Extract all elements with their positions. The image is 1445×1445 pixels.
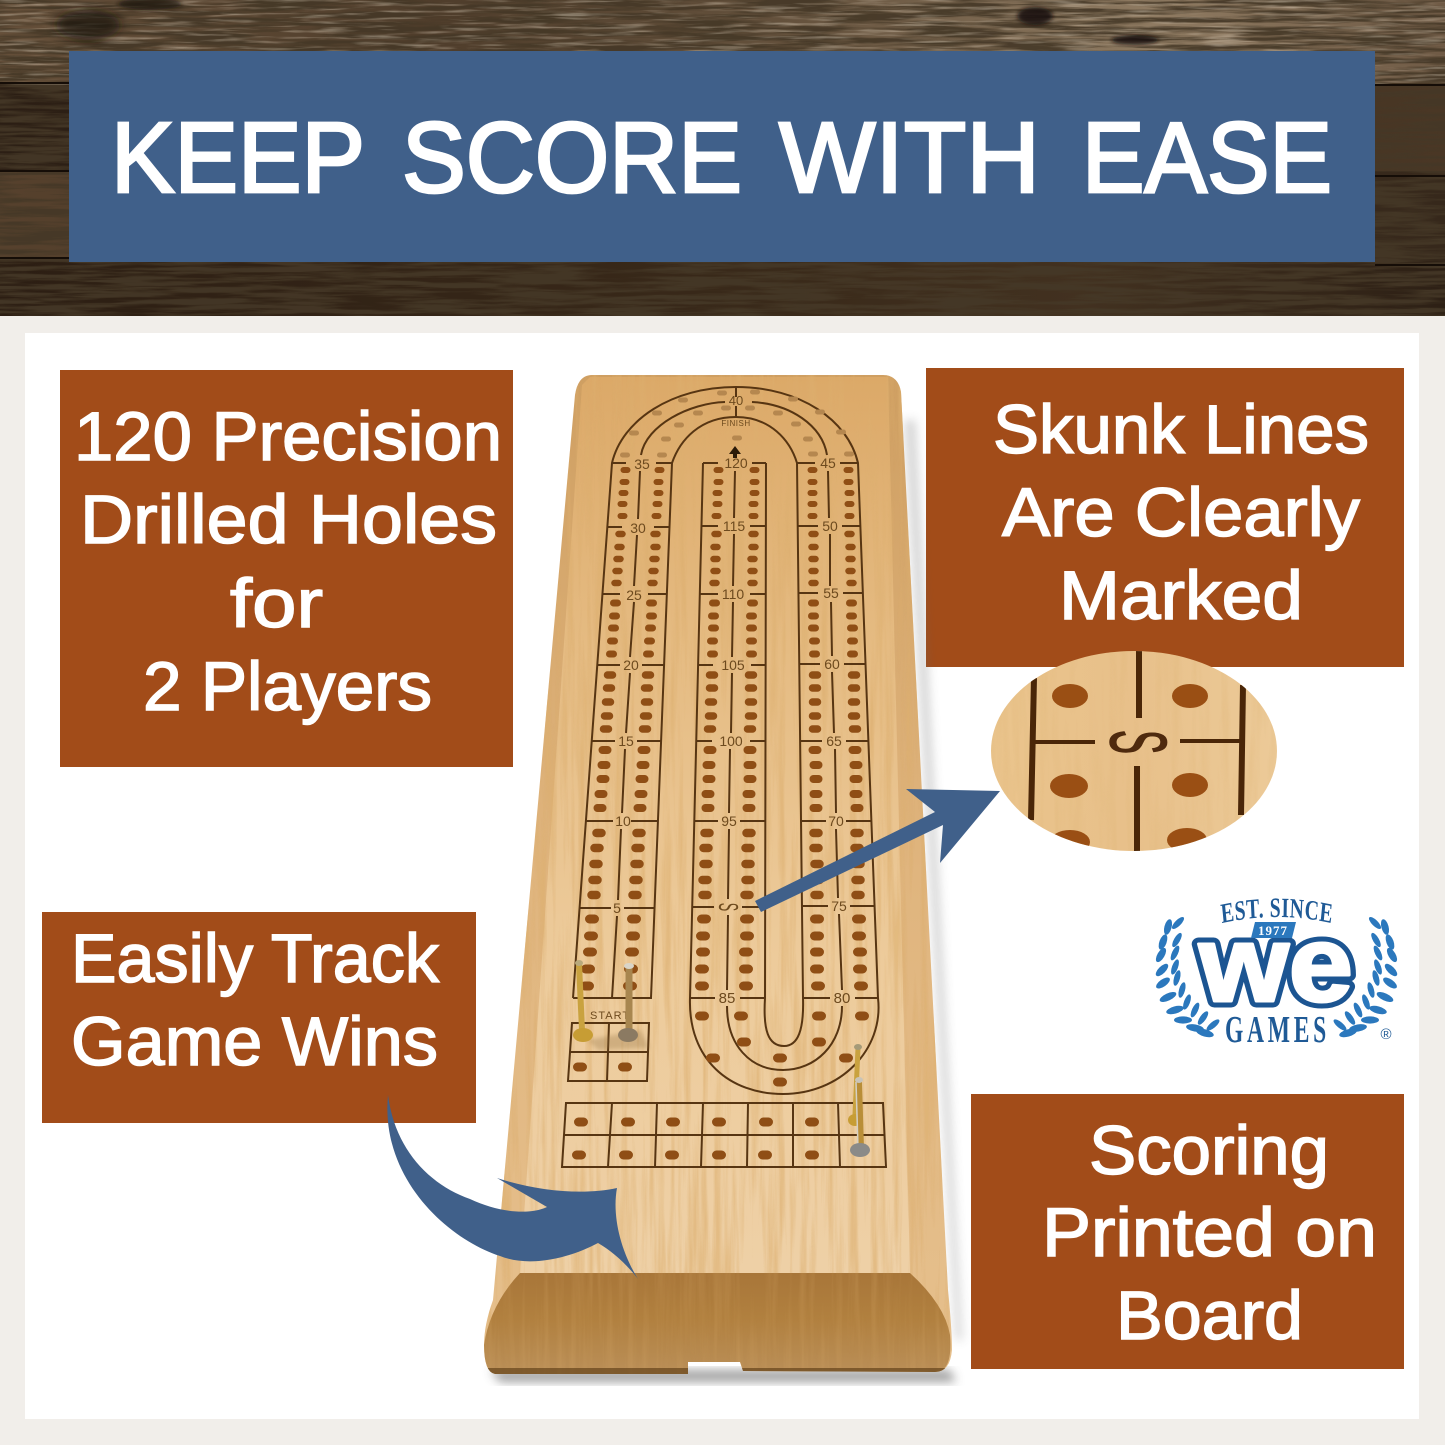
arrow: game wins pointer [387,1095,638,1279]
board numbers: 100 [719,733,743,749]
start box grid [568,1023,649,1081]
callout: track game wins: Easily Track [71,920,439,997]
board numbers: 15 [618,733,634,749]
board numbers: 105 [721,657,745,673]
board numbers: 55 [823,585,839,601]
logo games text: GAMES [1225,1008,1330,1050]
board numbers: 60 [824,656,840,672]
board numbers: 85 [719,990,735,1007]
board numbers: 45 [820,455,836,471]
header wood background [0,0,1445,316]
logo: WE Games [1156,898,1398,1050]
score grid [562,1103,886,1167]
board numbers: FINISH [721,419,751,428]
logo est since text: EST. SINCE [1220,898,1332,923]
logo 1977 banner: 1977 [1258,923,1288,938]
magnifier: skunk line close-up [985,645,1285,855]
board numbers: 110 [722,586,744,602]
logo laurel wreath left [1154,915,1221,1039]
logo 1977 banner [1251,922,1296,938]
callout: skunk lines [926,368,1404,667]
callout: 120 precision drilled holes: Drilled Holes [80,481,497,558]
board numbers: 115 [723,518,745,534]
title: KEEP [111,102,365,214]
callout: scoring printed on board: Scoring [1089,1112,1329,1189]
board numbers: 30 [630,520,646,536]
callout: 120 precision drilled holes [60,370,513,767]
arrow: skunk line pointer [755,789,1000,912]
board numbers: S [713,903,745,911]
title banner [69,51,1375,262]
board numbers: 5 [613,900,621,916]
title: SCORE [402,102,742,214]
cribbage board [480,370,962,1382]
board holes [576,392,864,1155]
logo we mark: we [1198,903,1353,1024]
board numbers: 20 [623,657,639,673]
board numbers: 50 [822,518,838,534]
callout: skunk lines: Skunk Lines [993,391,1369,468]
logo laurel wreath right [1332,915,1399,1039]
board track lines [573,387,879,1094]
board numbers: 35 [634,456,650,472]
callout: skunk lines: Marked [1059,557,1303,634]
board numbers [590,393,850,1022]
callout: 120 precision drilled holes: 2 Players [143,648,432,725]
title [111,102,1332,214]
title: WITH [779,102,1040,214]
board numbers: 10 [615,813,631,829]
board numbers: 75 [831,898,847,914]
magnifier: skunk line close-up: S [1093,730,1182,754]
callout: skunk lines: Are Clearly [1002,474,1361,551]
board numbers: START [590,1010,630,1022]
callout: track game wins: Game Wins [71,1003,438,1080]
logo registered mark: ® [1380,1026,1392,1043]
pegs [573,960,870,1157]
callout: 120 precision drilled holes: 120 Precision [74,398,502,475]
board numbers: 120 [724,455,748,471]
board numbers: 40 [729,393,743,408]
finish arrow [729,446,741,458]
board numbers: 80 [834,990,850,1007]
logo we mark: we [1198,903,1353,1024]
callout: scoring printed on board: Printed on [1042,1194,1377,1271]
callout: scoring printed on board: Board [1116,1277,1303,1354]
board numbers: 95 [721,813,737,829]
callout: scoring printed on board [971,1094,1404,1369]
title: EASE [1082,102,1332,214]
board numbers: 65 [826,733,842,749]
board numbers: 70 [828,813,844,829]
board numbers: 25 [626,587,642,603]
white content panel [25,333,1419,1419]
callout: 120 precision drilled holes: for [230,565,323,642]
callout: track game wins [42,912,476,1123]
